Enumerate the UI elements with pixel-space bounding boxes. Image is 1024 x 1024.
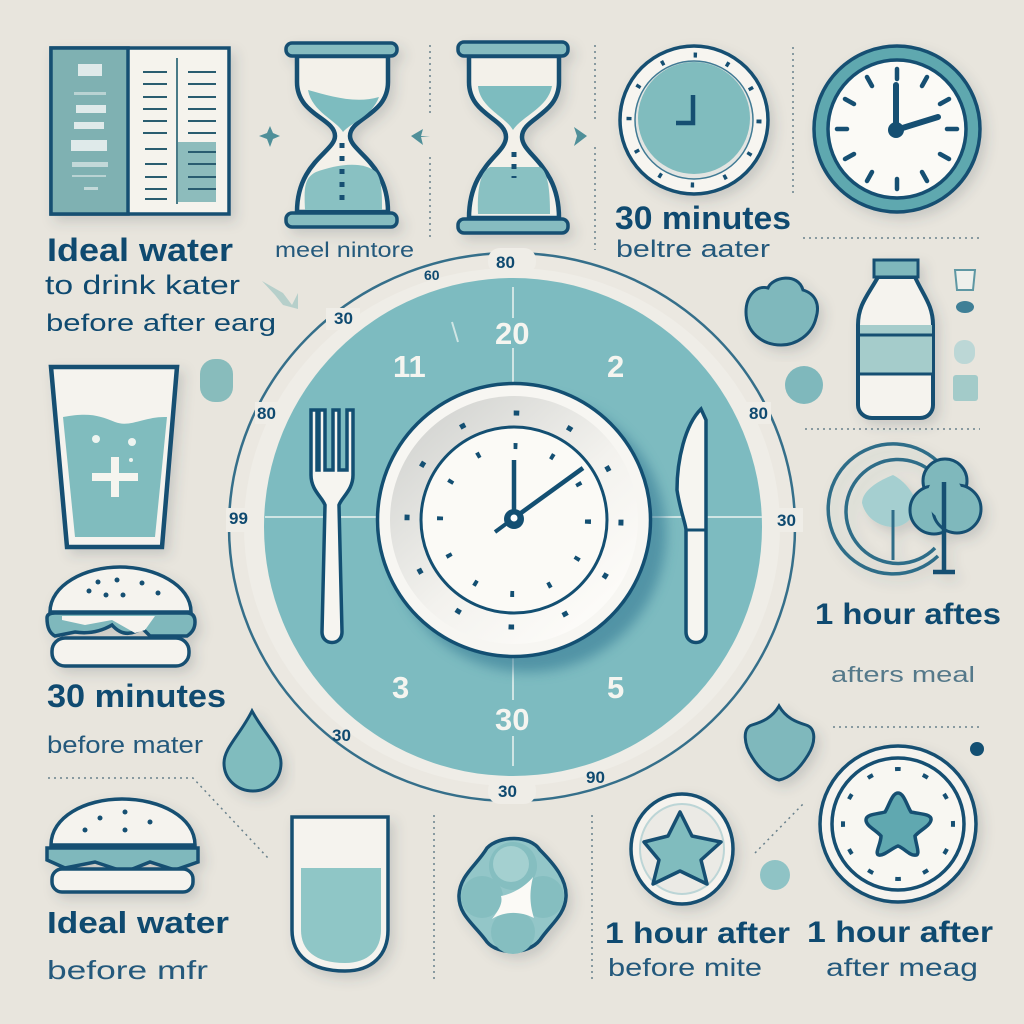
icon: leaf blob xyxy=(746,278,817,345)
labels: 1 hour after: after meag xyxy=(826,954,978,982)
label: 30 minutes: 30 minutes xyxy=(615,200,791,236)
label: 30 minutes: beltre aater xyxy=(616,236,770,263)
icon: trees xyxy=(828,444,981,574)
icon: water glass xyxy=(51,367,177,547)
icon: shield blob xyxy=(745,706,814,780)
heading: ideal water xyxy=(45,232,276,337)
icon: star clock xyxy=(820,746,976,902)
label: ideal water bottom: before mfr xyxy=(47,955,208,985)
chart: outer ring: 30 xyxy=(334,309,353,328)
label: ideal water bottom xyxy=(47,905,229,985)
heading: ideal water: Ideal water xyxy=(47,232,233,268)
label: 30 minutes xyxy=(615,200,791,263)
icon: burger bottom xyxy=(47,799,198,892)
label: ideal water bottom: Ideal water xyxy=(47,905,229,940)
chart: teal clock disc: 20 xyxy=(495,316,529,351)
labels: 1 hour after: 1 hour after xyxy=(605,917,790,950)
icon: small pill xyxy=(200,359,233,402)
icon: hourglass left xyxy=(286,43,397,227)
chart: outer ring: 30 xyxy=(777,511,796,530)
icon: small arrows xyxy=(259,126,587,147)
label: 30 minutes left: 30 minutes xyxy=(47,678,226,714)
icon: menu book xyxy=(51,48,229,214)
chart: teal clock disc: 5 xyxy=(607,670,624,705)
chart: teal clock disc: 30 xyxy=(495,702,529,737)
chart: outer ring: 80 xyxy=(749,404,768,423)
icon: small dot xyxy=(760,860,790,890)
icon: tall glass xyxy=(292,817,388,971)
icon: teal clock xyxy=(620,46,768,194)
icon: small side marks xyxy=(953,270,978,401)
chart: outer ring: 80 xyxy=(257,404,276,423)
chart: teal clock disc: 11 xyxy=(393,349,426,384)
chart: teal clock disc: 2 xyxy=(607,349,624,384)
icon: large clock xyxy=(814,46,980,212)
icon: small mark xyxy=(970,742,984,756)
icon: water drop xyxy=(224,711,281,791)
chart: outer ring: 30 xyxy=(498,782,517,801)
icon: bottle xyxy=(858,260,933,418)
chart: teal clock disc xyxy=(264,278,762,776)
chart: outer ring: 30 xyxy=(332,726,351,745)
heading: ideal water: to drink kater xyxy=(45,270,240,300)
label: meal minutes: meel nintore xyxy=(275,239,414,262)
chart: outer ring: 90 xyxy=(586,768,605,787)
label: 1 hour aftes: afters meal xyxy=(831,662,975,687)
chart: outer ring xyxy=(226,248,803,804)
labels: 1 hour after: before mite xyxy=(608,954,762,982)
chart: outer ring: 80 xyxy=(496,253,515,272)
heading: ideal water: before after earg xyxy=(46,310,276,337)
icon: knife xyxy=(677,409,706,642)
label: 30 minutes left xyxy=(47,678,226,759)
label: 30 minutes left: before mater xyxy=(47,732,203,759)
chart: outer ring: 60 xyxy=(424,267,440,283)
icon: faint diamond mark xyxy=(262,281,298,309)
icon: burger top xyxy=(47,567,195,666)
chart: outer ring: 99 xyxy=(229,509,248,528)
icon: small dot right xyxy=(785,366,823,404)
icon: round gem xyxy=(459,838,566,954)
icon: plate clock xyxy=(378,384,666,672)
chart: teal clock disc: 3 xyxy=(392,670,409,705)
labels: 1 hour after: 1 hour after xyxy=(807,916,993,949)
label: 1 hour aftes: 1 hour aftes xyxy=(815,598,1001,631)
icon: star badge xyxy=(631,794,733,904)
icon: hourglass right xyxy=(458,42,568,233)
icon: fork xyxy=(311,410,353,642)
label: 1 hour aftes xyxy=(815,598,1001,687)
labels: 1 hour after xyxy=(605,916,993,982)
